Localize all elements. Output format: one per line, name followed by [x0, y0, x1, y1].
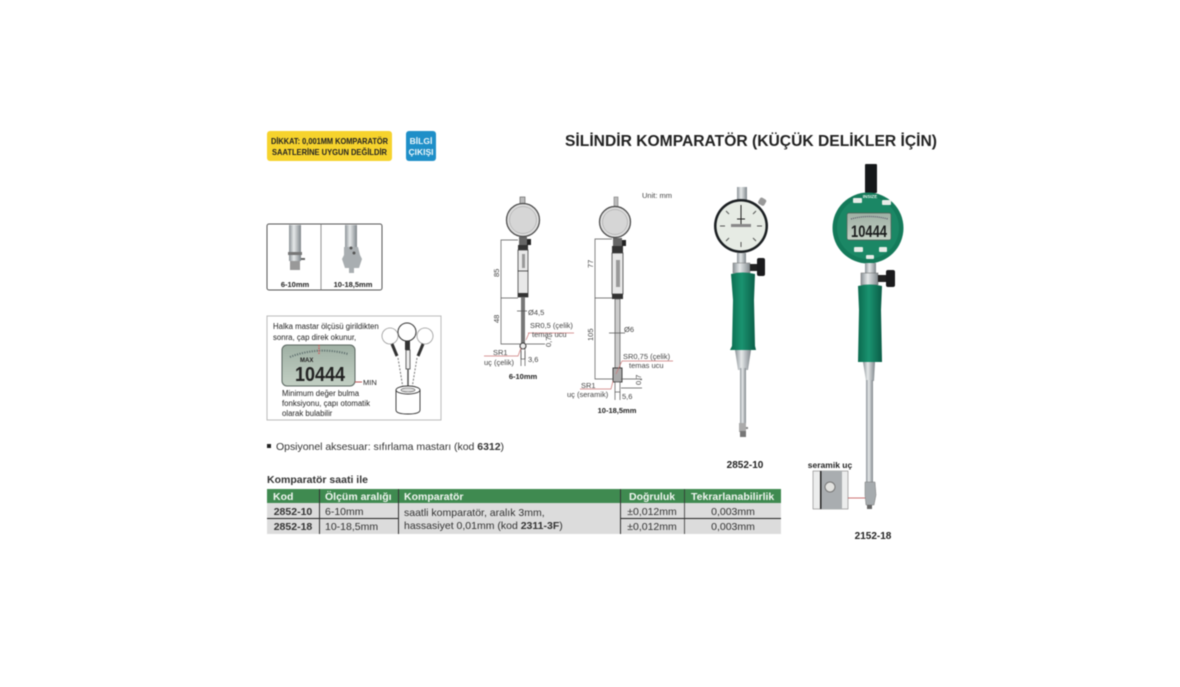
product: digital bore gauge 2152-18: [832, 164, 904, 509]
gauge stem top: [737, 187, 747, 201]
drawing body: [506, 197, 540, 359]
label: 6-10mm: 6-10mm: [509, 372, 538, 381]
top cap: [865, 164, 877, 193]
table rows: hassasiyet 0,01mm (kod 2311-3F): [404, 520, 563, 532]
label: 10-18,5mm: 10-18,5mm: [334, 280, 373, 289]
dimensions: temas ucu: [629, 361, 664, 370]
digital dial: [832, 192, 904, 264]
text: ring gauge note: Halka mastar ölçüsü girildikten: [273, 322, 379, 331]
text: minimum finding note: Minimum değer bulma: [282, 389, 360, 398]
dimensions: 0,7: [544, 337, 553, 347]
text: ring gauge note: [273, 322, 379, 342]
green grip: [730, 272, 756, 350]
table rows: 2852-10: [274, 506, 312, 518]
dimensions: 77: [586, 260, 595, 268]
panel: minimum value function: [267, 316, 441, 420]
table rows: [267, 489, 781, 534]
warning badge: DİKKAT: 0,001MM KOMPARATÖR: [271, 136, 388, 146]
dial: [714, 197, 768, 253]
icon: 10-18.5mm contact point: [342, 225, 362, 273]
dimensions: 0,7: [634, 375, 643, 385]
table header: Kod: [273, 491, 293, 503]
technical drawing: 10-18.5mm: [567, 197, 673, 415]
neck and clamp: [733, 253, 765, 276]
warning badge: SAATLERİNE UYGUN DEĞİLDİR: [272, 146, 387, 157]
table heading: Komparatör saati ile: [267, 474, 368, 486]
label: MIN: MIN: [363, 378, 377, 387]
product: dial bore gauge 2852-10: [714, 187, 768, 437]
dimensions: SR1: [493, 348, 508, 357]
dimensions: 105: [586, 328, 595, 341]
table rows: 2852-18: [274, 521, 312, 533]
table rows: 10-18,5mm: [325, 521, 378, 533]
title: SİLİNDİR KOMPARATÖR (KÜÇÜK DELİKLER İÇİN): [565, 131, 937, 150]
table rows: 0,003mm: [711, 506, 755, 518]
icon: 6-10mm contact point: [288, 225, 305, 270]
dimensions: 5,6: [622, 392, 632, 401]
product label: 2852-10: 2852-10: [727, 460, 764, 471]
digital readout: 10444: [851, 222, 887, 241]
dimensions: temas ucu: [532, 330, 567, 339]
unit note: Unit: mm: [642, 191, 672, 200]
icon: gauge in ring: [382, 323, 433, 414]
dimensions: SR0,75 (çelik): [623, 352, 671, 361]
neck and clamp: [861, 263, 895, 287]
label: 6-10mm: 6-10mm: [281, 280, 310, 289]
text: minimum finding note: [282, 389, 370, 418]
dimensions: uç (çelik): [484, 358, 515, 367]
shaft: [863, 362, 876, 509]
inset: ceramic tip: [808, 460, 865, 509]
label: ceramic tip: seramik uç: [808, 460, 852, 470]
dimensions: SR0,5 (çelik): [530, 321, 573, 330]
table header: Ölçüm aralığı: [325, 490, 392, 503]
table rows: ±0,012mm: [627, 521, 677, 533]
data output badge: [406, 131, 436, 161]
dimensions: 85: [492, 269, 501, 277]
table rows: 0,003mm: [711, 521, 755, 533]
data output badge: BİLGİ: [410, 136, 432, 146]
text: minimum finding note: olarak bulabilir: [282, 409, 333, 418]
green grip: [858, 284, 882, 362]
dimensions: 48: [492, 315, 501, 323]
label: 10-18,5mm: 10-18,5mm: [598, 406, 637, 415]
table header: Tekrarlanabilirlik: [691, 491, 774, 503]
optional accessory note: Opsiyonel aksesuar: sıfırlama mastarı (kod 6312): [276, 441, 504, 453]
dimensions: 3,6: [528, 355, 538, 364]
data output badge: ÇIKIŞI: [408, 147, 434, 157]
technical drawing: 6-10mm: [484, 197, 574, 381]
dimensions: SR1: [581, 381, 596, 390]
table header: [267, 489, 781, 503]
drawing body: [600, 197, 630, 392]
dimensions: [567, 239, 673, 415]
dimensions: Ø4,5: [528, 308, 544, 317]
specification table: [267, 489, 781, 534]
table header: Komparatör: [404, 491, 464, 503]
label: MIN: [355, 378, 377, 387]
product label: 2152-18: 2152-18: [855, 531, 892, 542]
panel: contact point thumbnails: [267, 224, 382, 290]
logo: INSIZE: [863, 194, 877, 199]
text: ring gauge note: sonra, çap direk okunur,: [273, 333, 356, 342]
dimensions: Ø6: [624, 325, 634, 334]
icon: LCD display: [282, 345, 355, 386]
table rows: 6-10mm: [325, 506, 364, 518]
table header: Doğruluk: [629, 491, 675, 503]
table rows: ±0,012mm: [627, 506, 677, 518]
text: minimum finding note: fonksiyonu, çapı otomatik: [282, 399, 370, 408]
lower shaft: [735, 350, 751, 437]
table rows: saatli komparatör, aralık 3mm,: [404, 507, 545, 519]
icon: LCD display: 10444: [295, 364, 346, 386]
warning badge: [267, 131, 392, 161]
dimensions: [484, 240, 574, 381]
dimensions: uç (seramik): [567, 390, 609, 399]
icon: LCD display: MAX: [300, 358, 313, 364]
